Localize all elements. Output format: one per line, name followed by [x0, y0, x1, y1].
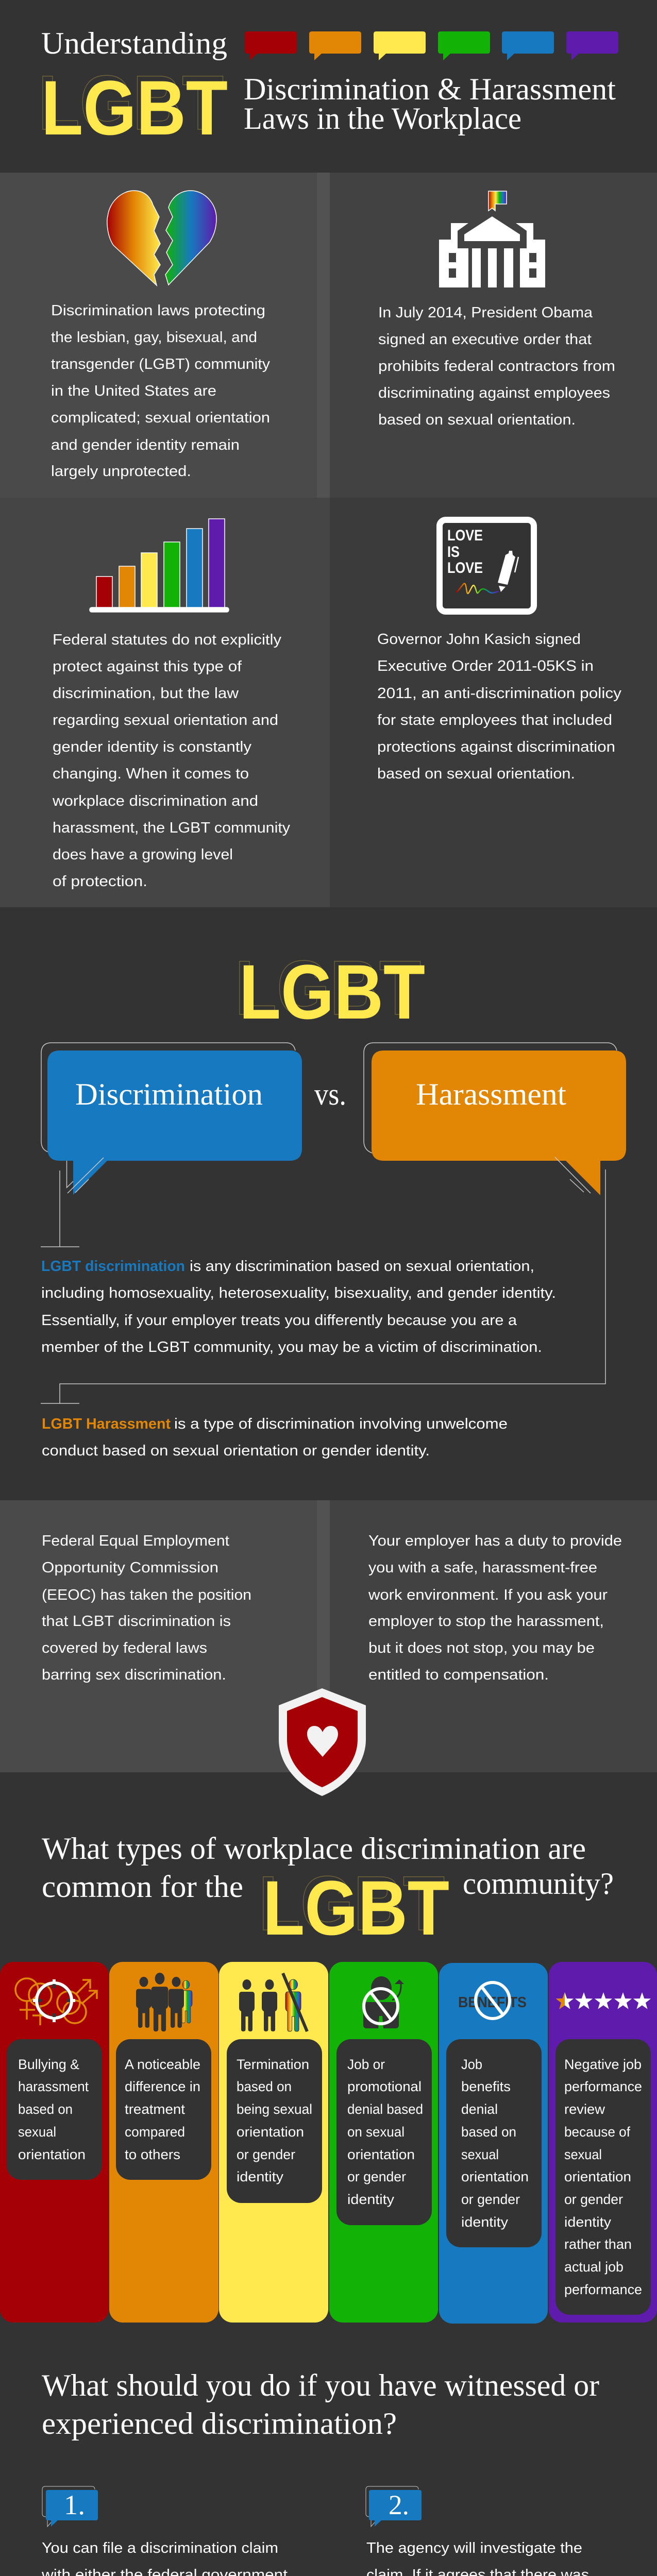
icon: star rating: [556, 1992, 651, 2009]
text: employer duty: [368, 1533, 622, 1683]
text box: treatment: difference in: [125, 2079, 200, 2094]
text box: performance review: actual job: [564, 2259, 624, 2275]
text box: promotion: Job or: [347, 2057, 385, 2072]
text: LGBT discrimination definition: member of the LGBT community, you may be a victim of discrimination.: [41, 1339, 542, 1355]
text box: treatment: compared: [125, 2124, 185, 2140]
callout: harassment bubble: [364, 1043, 626, 1195]
panel: EEOC: [0, 1500, 330, 1772]
heading: what should you do: [42, 2368, 599, 2441]
text box: benefits: based on: [461, 2124, 516, 2140]
text box: performance review: performance: [564, 2079, 642, 2094]
text: discrimination laws: transgender (LGBT) community: [51, 356, 271, 372]
text: governor order: for state employees that included: [377, 712, 612, 728]
text: employer duty: Your employer has a duty to provide: [368, 1533, 622, 1549]
text box: promotion: [336, 2039, 432, 2225]
text box: performance review: performance: [564, 2282, 642, 2297]
text box: bullying: harassment: [18, 2079, 89, 2094]
text: executive order: In July 2014, President Obama: [378, 304, 593, 321]
title: subtitle: [244, 72, 616, 135]
text: federal statutes: workplace discrimination and: [52, 793, 258, 809]
text: EEOC position: that LGBT discrimination is: [42, 1613, 231, 1630]
text box: termination: Termination: [237, 2057, 309, 2072]
heading: types of discrimination: community?: [463, 1867, 614, 1901]
heading: types of discrimination: What types of workplace discrimination are: [42, 1832, 586, 1866]
text: discrimination laws: largely unprotected.: [51, 463, 191, 480]
text: LGBT harassment definition: [42, 1416, 508, 1459]
step 2 bubble: 2.: [389, 2489, 409, 2520]
title block: [38, 26, 618, 151]
text box: bullying: Bullying &: [18, 2057, 79, 2072]
text: LGBT discrimination definition: LGBT discrimination: [41, 1258, 185, 1275]
heading: what should you do: experienced discrimination?: [42, 2406, 397, 2441]
text: federal statutes: changing. When it comes to: [53, 766, 249, 782]
text box: treatment: [116, 2039, 211, 2180]
text: step 2: The agency will investigate the: [366, 2540, 582, 2556]
icon: gender symbols with target: [15, 1978, 97, 2025]
text box: performance review: orientation: [564, 2169, 631, 2184]
heading: LGBT: LGBT: [239, 948, 425, 1035]
text box: promotion: orientation: [347, 2147, 415, 2162]
connector lines: [41, 1170, 605, 1403]
text box: termination: or gender: [237, 2147, 295, 2162]
icon: love is love document: IS: [447, 544, 460, 561]
icon: group of people: [136, 1973, 192, 2031]
title: LGBT: LGBT: [41, 64, 228, 151]
icon: no benefits: [458, 1982, 527, 2019]
text: step 1: You can file a discrimination claim: [42, 2540, 278, 2556]
callout: discrimination bubble: [41, 1043, 302, 1195]
text box: performance review: or gender: [564, 2192, 623, 2207]
heading: LGBT: LGBT: [235, 944, 421, 1031]
text: employer duty: entitled to compensation.: [368, 1667, 549, 1683]
panel: federal statutes: [0, 498, 330, 907]
text: vs.: vs.: [314, 1077, 346, 1111]
text: EEOC position: Federal Equal Employment: [42, 1533, 229, 1549]
text box: termination: [227, 2039, 322, 2203]
icon: love is love document: [440, 520, 534, 612]
text box: bullying: [7, 2039, 102, 2180]
text box: bullying: based on: [18, 2102, 73, 2117]
panel: employer duty: [330, 1500, 657, 1772]
text box: promotion: identity: [347, 2192, 395, 2207]
text: discrimination laws: [51, 302, 271, 480]
text: step 1: [41, 2540, 288, 2576]
text: discrimination laws: the lesbian, gay, bisexual, and: [51, 329, 257, 346]
text: federal statutes: protect against this type of: [53, 658, 242, 675]
text: EEOC position: Opportunity Commission: [42, 1560, 218, 1576]
text: governor order: [377, 631, 622, 782]
text box: benefits: benefits: [461, 2079, 511, 2094]
panel: benefits column: [439, 1963, 548, 2324]
text: executive order: [378, 304, 615, 428]
text box: promotion: denial based: [347, 2102, 423, 2117]
icon: love is love document: LOVE: [447, 527, 483, 544]
text box: benefits: or gender: [461, 2192, 520, 2207]
text: employer duty: work environment. If you ask your: [368, 1587, 608, 1603]
text: federal statutes: does have a growing level: [53, 846, 233, 863]
text box: performance review: sexual: [564, 2147, 602, 2162]
icon: denied promotion: [363, 1976, 404, 2028]
title: subtitle: Discrimination & Harassment: [244, 72, 616, 106]
text box: treatment: to others: [125, 2147, 180, 2162]
text box: bullying: sexual: [18, 2124, 56, 2140]
text: executive order: based on sexual orientation.: [378, 412, 576, 428]
text box: promotion: promotional: [347, 2079, 422, 2094]
text: LGBT discrimination definition: including homosexuality, heterosexuality, bisexuality, and gender identity.: [41, 1285, 556, 1301]
text: step 2: [366, 2540, 610, 2576]
title: subtitle: Laws in the Workplace: [244, 101, 521, 135]
text: federal statutes: gender identity is constantly: [53, 739, 252, 755]
icon: love is love document: LOVE: [447, 560, 483, 577]
text box: termination: orientation: [237, 2124, 304, 2140]
text box: treatment: A noticeable: [125, 2057, 200, 2072]
text box: benefits: orientation: [461, 2169, 529, 2184]
text: LGBT harassment definition: is a type of discrimination involving unwelcome: [174, 1416, 508, 1432]
text: executive order: discriminating against employees: [378, 385, 610, 401]
text box: bullying: orientation: [18, 2147, 86, 2162]
text: federal statutes: of protection.: [53, 873, 147, 890]
text: executive order: signed an executive order that: [378, 331, 592, 348]
text: governor order: Governor John Kasich signed: [377, 631, 581, 648]
text: discrimination laws: and gender identity remain: [51, 437, 240, 453]
text box: benefits: denial: [461, 2102, 498, 2117]
step 1 bubble: 1.: [64, 2489, 85, 2520]
heading: types of discrimination: LGBT: [259, 1860, 445, 1946]
title: Understanding: Understanding: [41, 26, 227, 60]
text: LGBT discrimination definition: Essentially, if your employer treats you differently because you are a: [41, 1312, 517, 1329]
step 2 bubble: [366, 2486, 422, 2527]
text: LGBT discrimination definition: is any discrimination based on sexual orientation,: [190, 1258, 534, 1275]
text: EEOC position: covered by federal laws: [42, 1640, 207, 1656]
text: governor order: based on sexual orientation.: [377, 766, 575, 782]
panel: termination column: [219, 1962, 328, 2323]
text box: performance review: review: [564, 2102, 605, 2117]
heading: types of discrimination: [42, 1832, 614, 1951]
text: LGBT harassment definition: conduct based on sexual orientation or gender identity.: [42, 1443, 430, 1459]
icon: broken rainbow heart: [107, 191, 216, 285]
text box: performance review: Negative job: [564, 2057, 642, 2072]
text: discrimination laws: Discrimination laws protecting: [51, 302, 265, 319]
text: employer duty: but it does not stop, you may be: [368, 1640, 595, 1656]
text: LGBT discrimination definition: [41, 1258, 556, 1355]
panel: discrimination laws: [0, 173, 330, 498]
text box: performance review: [555, 2039, 651, 2315]
text box: benefits: [446, 2039, 542, 2247]
heading: types of discrimination: LGBT: [263, 1865, 449, 1951]
text: federal statutes: discrimination, but the law: [53, 685, 239, 702]
text: EEOC position: (EEOC) has taken the position: [42, 1587, 251, 1603]
text box: treatment: treatment: [125, 2102, 185, 2117]
callout: harassment bubble: Harassment: [416, 1077, 566, 1111]
panel: governor order: [330, 498, 657, 907]
panel: treatment column: [109, 1962, 218, 2323]
text: federal statutes: [52, 632, 291, 890]
text: LGBT harassment definition: LGBT Harassment: [42, 1416, 171, 1432]
text box: performance review: because of: [564, 2124, 630, 2140]
text: EEOC position: [42, 1533, 251, 1683]
text: EEOC position: barring sex discrimination.: [42, 1667, 226, 1683]
heading: types of discrimination: common for the: [42, 1870, 243, 1904]
icon: capitol building with flag: [439, 191, 545, 287]
text: governor order: Executive Order 2011-05KS in: [377, 658, 594, 674]
text: discrimination laws: complicated; sexual orientation: [51, 410, 270, 426]
text: employer duty: employer to stop the harassment,: [368, 1613, 604, 1630]
panel: executive order: [330, 173, 657, 498]
panel: promotion column: [329, 1962, 438, 2323]
panel: bullying column: [0, 1962, 109, 2323]
text box: promotion: on sexual: [347, 2124, 405, 2140]
text box: termination: identity: [237, 2169, 284, 2184]
text: governor order: 2011, an anti-discrimination policy: [377, 685, 622, 702]
rainbow speech bubbles: [245, 31, 618, 60]
panel: performance review column: [549, 1962, 657, 2323]
title: LGBT outline: LGBT: [38, 59, 224, 146]
icon: crossed out person: [239, 1973, 307, 2031]
icon: no benefits: BENEFITS: [458, 1994, 527, 2011]
text box: benefits: sexual: [461, 2147, 499, 2162]
icon: shield with heart: [279, 1688, 366, 1796]
icon: rainbow bar chart: [90, 519, 229, 612]
text: governor order: protections against discrimination: [377, 739, 615, 755]
step 1 bubble: [42, 2486, 98, 2527]
text: employer duty: you with a safe, harassment-free: [368, 1560, 597, 1576]
text box: termination: being sexual: [237, 2102, 312, 2117]
heading: what should you do: What should you do if you have witnessed or: [42, 2368, 599, 2402]
text box: benefits: identity: [461, 2214, 509, 2230]
text: federal statutes: harassment, the LGBT community: [53, 820, 291, 836]
text box: termination: based on: [237, 2079, 292, 2094]
text: federal statutes: Federal statutes do not explicitly: [53, 632, 282, 648]
text: federal statutes: regarding sexual orientation and: [53, 712, 278, 728]
callout: discrimination bubble: Discrimination: [75, 1077, 263, 1111]
text box: performance review: rather than: [564, 2236, 632, 2252]
text box: promotion: or gender: [347, 2169, 406, 2184]
text box: performance review: identity: [564, 2214, 612, 2230]
text: executive order: prohibits federal contractors from: [378, 358, 615, 375]
text: discrimination laws: in the United States are: [51, 383, 216, 399]
text box: benefits: Job: [461, 2057, 482, 2072]
